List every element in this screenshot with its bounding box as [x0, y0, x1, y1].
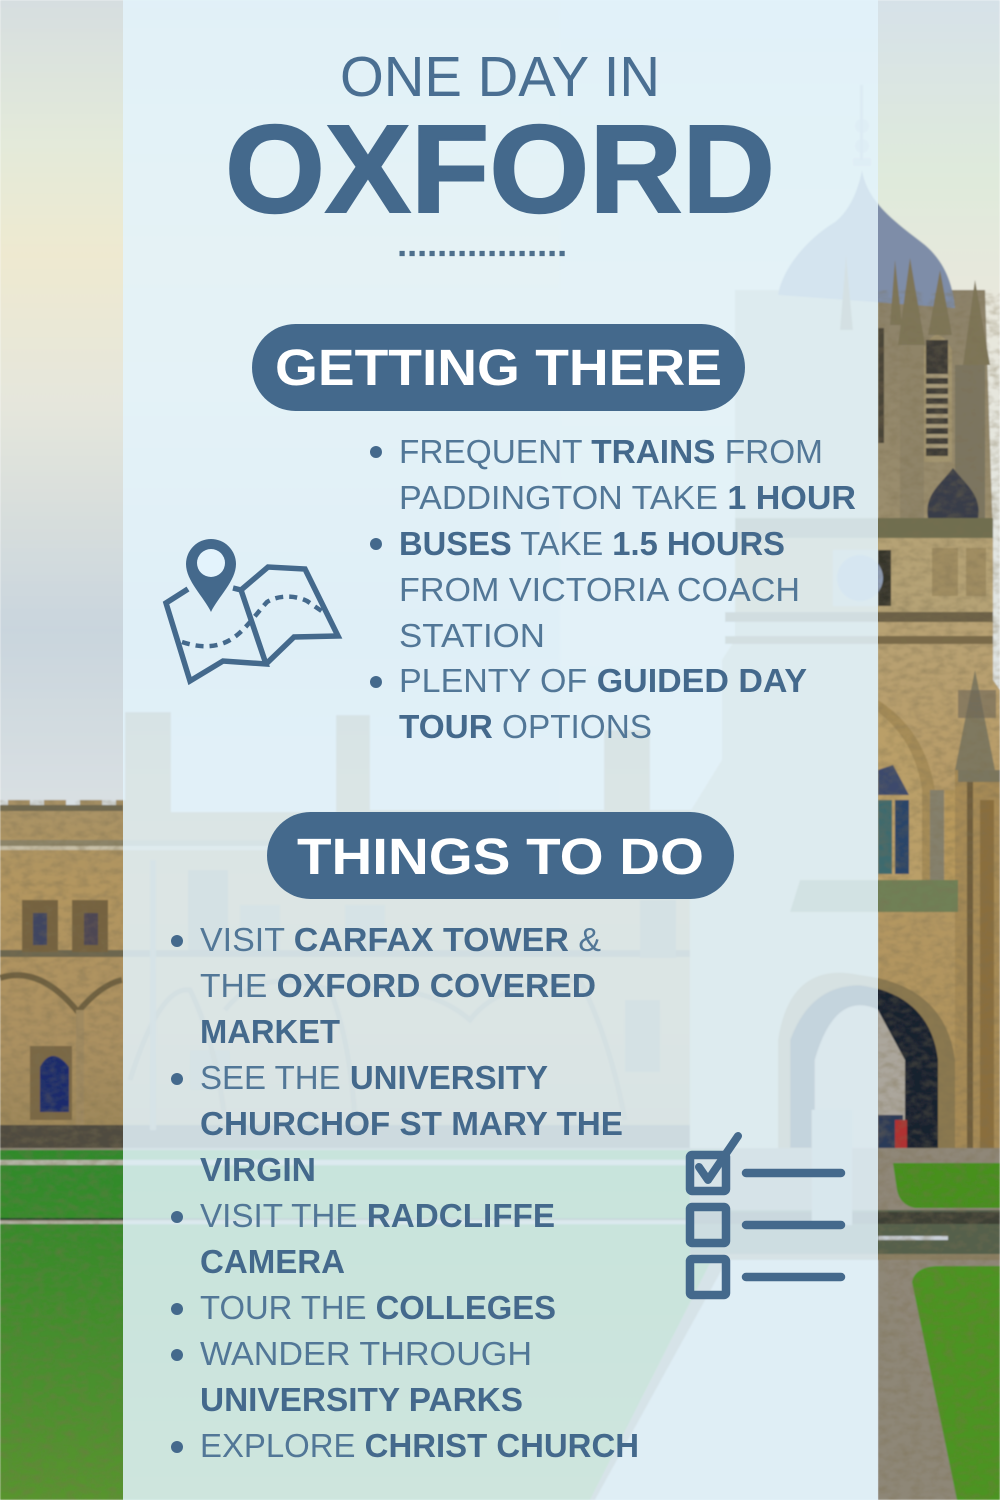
text block: getting there list: STATION — [399, 617, 545, 654]
text block: getting there list — [370, 433, 856, 745]
text block: things to do list: CAMERA — [200, 1243, 345, 1280]
text block: getting there list: FROM VICTORIA COACH — [399, 571, 800, 608]
text block: things to do list: TOUR THE COLLEGES — [200, 1289, 556, 1326]
text block: getting there list: PADDINGTON TAKE 1 HOUR — [399, 479, 856, 516]
text block: things to do list: CHURCHOF ST MARY THE — [200, 1105, 623, 1142]
title — [225, 45, 775, 239]
text block: things to do list: UNIVERSITY PARKS — [200, 1381, 523, 1418]
text block: things to do list: VISIT THE RADCLIFFE — [200, 1197, 555, 1234]
text block: things to do list: SEE THE UNIVERSITY — [200, 1059, 548, 1096]
stone and grass texture — [0, 800, 123, 1500]
title: ONE DAY IN — [340, 45, 660, 109]
lawns and paths — [0, 1110, 1000, 1500]
text block: things to do list: EXPLORE CHRIST CHURCH — [200, 1427, 639, 1464]
text block: getting there list: FREQUENT TRAINS FROM — [399, 433, 823, 470]
section heading: things to do: THINGS TO DO — [297, 828, 704, 885]
text block: things to do list: MARKET — [200, 1013, 340, 1050]
college building left — [0, 712, 750, 1150]
text block: things to do list — [171, 921, 639, 1464]
tom tower — [690, 85, 1000, 1160]
section heading: getting there — [252, 324, 745, 411]
text block: getting there list: PLENTY OF GUIDED DAY — [399, 662, 807, 699]
text block: things to do list: WANDER THROUGH — [200, 1335, 532, 1372]
text block: things to do list: THE OXFORD COVERED — [200, 967, 596, 1004]
text block: things to do list: VIRGIN — [200, 1151, 316, 1188]
icon: folded map with location pin — [166, 539, 338, 681]
text block: getting there list: BUSES TAKE 1.5 HOURS — [399, 525, 785, 562]
text block: things to do list: VISIT CARFAX TOWER & — [200, 921, 601, 958]
icon: checklist — [690, 1136, 841, 1295]
text block: getting there list: TOUR OPTIONS — [399, 708, 652, 745]
title: OXFORD — [225, 100, 775, 239]
translucent text panel — [123, 0, 878, 1500]
section heading: things to do — [267, 812, 734, 899]
section heading: getting there: GETTING THERE — [275, 339, 722, 396]
